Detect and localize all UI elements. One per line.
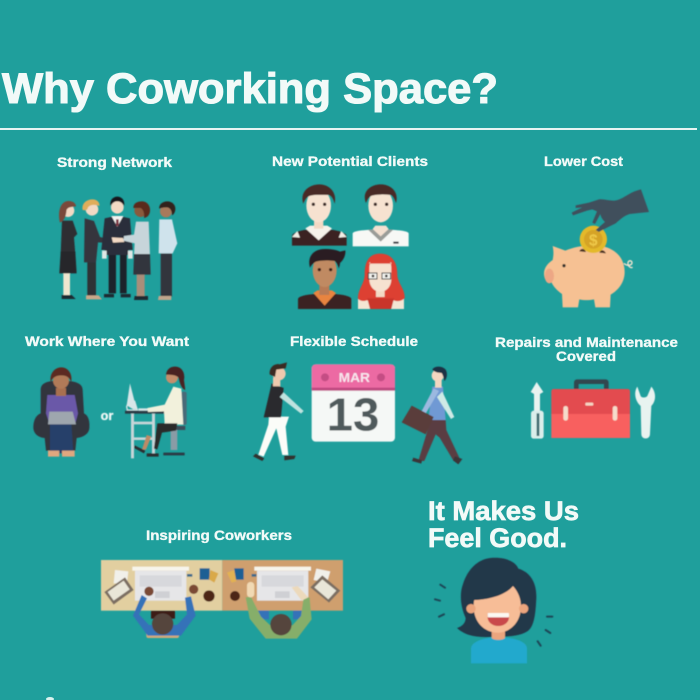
person walking left (253, 362, 304, 461)
heading: work where you want: Work Where You Want (25, 333, 189, 349)
teal shirt (471, 637, 527, 663)
wrench (635, 387, 655, 438)
desk with monitor (127, 383, 137, 409)
hand dropping coin (572, 189, 649, 232)
screwdriver (531, 382, 544, 439)
heading: it makes us feel good: It Makes Us (428, 496, 579, 526)
avatar: man with dark skin (298, 249, 351, 309)
face (474, 586, 521, 633)
woman at desk (125, 367, 187, 458)
left coworker (133, 585, 198, 638)
chair (181, 392, 187, 425)
decorative mark at bottom (46, 697, 54, 700)
woman on armchair with laptop (33, 367, 89, 457)
person: woman in grey (123, 201, 151, 300)
hair (457, 558, 536, 637)
person: man in light blue shirt (158, 201, 177, 300)
gold coin: $ (589, 232, 598, 249)
word: or: or (101, 409, 113, 423)
handshake (112, 237, 124, 243)
person: blond man (82, 199, 113, 299)
pig tail (624, 261, 633, 268)
pig snout (545, 269, 554, 283)
icon: group of business people (59, 197, 177, 300)
heading: repairs and maintenance covered: Covered (556, 348, 616, 364)
heading: it makes us feel good (428, 496, 579, 553)
calendar month: MAR (339, 371, 370, 385)
toolbox (551, 379, 630, 438)
person: woman in black skirt (59, 201, 77, 299)
heading: lower cost: Lower Cost (544, 153, 623, 169)
heading: inspiring coworkers: Inspiring Coworkers (146, 527, 292, 543)
heading: it makes us feel good: Feel Good. (428, 523, 567, 553)
icon: four client avatars (292, 184, 409, 309)
left laptop, tablet and coffee (104, 567, 218, 605)
person: man in dark suit (101, 197, 133, 297)
person (147, 387, 183, 425)
person walking right with briefcase (402, 367, 462, 464)
icon: smiling woman (435, 558, 552, 663)
calendar (312, 364, 395, 442)
avatar: man with dark jacket (292, 184, 347, 246)
heading: new potential clients: New Potential Clients (272, 153, 428, 169)
avatar: red haired woman with glasses (358, 254, 405, 309)
icon: armchair or desk (33, 367, 187, 458)
heading: repairs and maintenance covered: Repairs and Maintenance (495, 334, 678, 350)
icon: calendar with two walkers (253, 362, 462, 464)
heading: repairs and maintenance covered (495, 334, 678, 364)
pig body (544, 245, 625, 307)
heading: flexible schedule: Flexible Schedule (290, 333, 418, 349)
icon: piggy bank with coin (544, 189, 649, 307)
neck (492, 627, 505, 640)
smile (488, 613, 509, 626)
right laptop, tablet and coffee (227, 567, 340, 603)
avatar: man with white shirt (353, 184, 409, 246)
icon: screwdriver, toolbox and wrench (531, 379, 655, 439)
desk surface (101, 560, 343, 611)
joy marks (435, 585, 552, 646)
calendar day: 13 (327, 388, 379, 440)
heading: strong network: Strong Network (57, 154, 172, 170)
right coworker (246, 582, 312, 639)
icon: two coworkers at shared desk (101, 560, 343, 639)
title: Why Coworking Space? (2, 65, 498, 113)
